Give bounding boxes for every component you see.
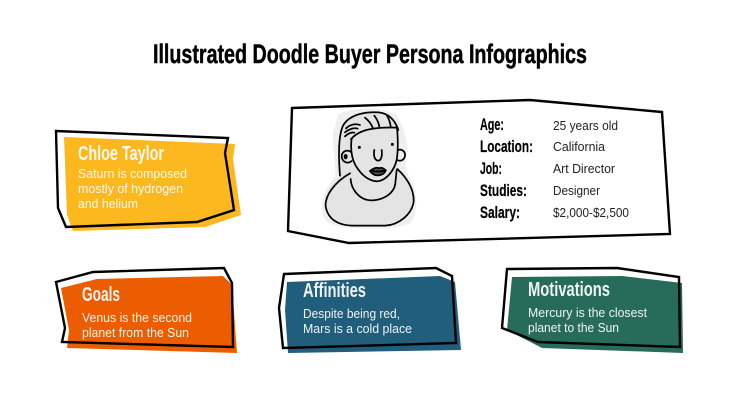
profile details: 25 years old xyxy=(553,119,618,133)
profile details: California xyxy=(553,140,605,154)
panel: Affinities: Mars is a cold place xyxy=(303,322,412,336)
panel: Affinities: Despite being red, xyxy=(303,307,400,321)
panel: Motivations: Motivations xyxy=(528,279,610,301)
panel: Goals: Goals xyxy=(82,284,120,306)
profile details: $2,000-$2,500 xyxy=(553,206,629,220)
panel: Chloe Taylor: Chloe Taylor xyxy=(78,143,164,165)
profile details: Age: xyxy=(480,115,504,134)
panel: Goals: planet from the Sun xyxy=(82,326,189,340)
panel: Affinities xyxy=(279,268,461,353)
panel: persona profile xyxy=(288,100,670,243)
profile details: Art Director xyxy=(553,162,615,176)
profile details: Studies: xyxy=(480,181,527,200)
profile details: Job: xyxy=(480,159,502,178)
panel: Motivations: Mercury is the closest xyxy=(528,306,648,320)
panel: Affinities: Affinities xyxy=(303,280,366,302)
panel: Goals: Venus is the second xyxy=(82,311,192,325)
panel: Motivations: planet to the Sun xyxy=(528,321,619,335)
panel: Chloe Taylor: mostly of hydrogen xyxy=(78,182,183,196)
panel: Chloe Taylor: Saturn is composed xyxy=(78,167,187,181)
profile details xyxy=(480,115,629,222)
panel: Motivations xyxy=(502,268,683,353)
profile details: Designer xyxy=(553,184,600,198)
panel: Chloe Taylor xyxy=(56,131,241,231)
panel: Chloe Taylor: and helium xyxy=(78,197,138,211)
profile details: Salary: xyxy=(480,203,520,222)
profile details: Location: xyxy=(480,137,533,156)
panel: Goals xyxy=(56,268,237,353)
title: Illustrated Doodle Buyer Persona Infographics xyxy=(153,39,587,69)
illustration: persona portrait xyxy=(322,109,416,229)
